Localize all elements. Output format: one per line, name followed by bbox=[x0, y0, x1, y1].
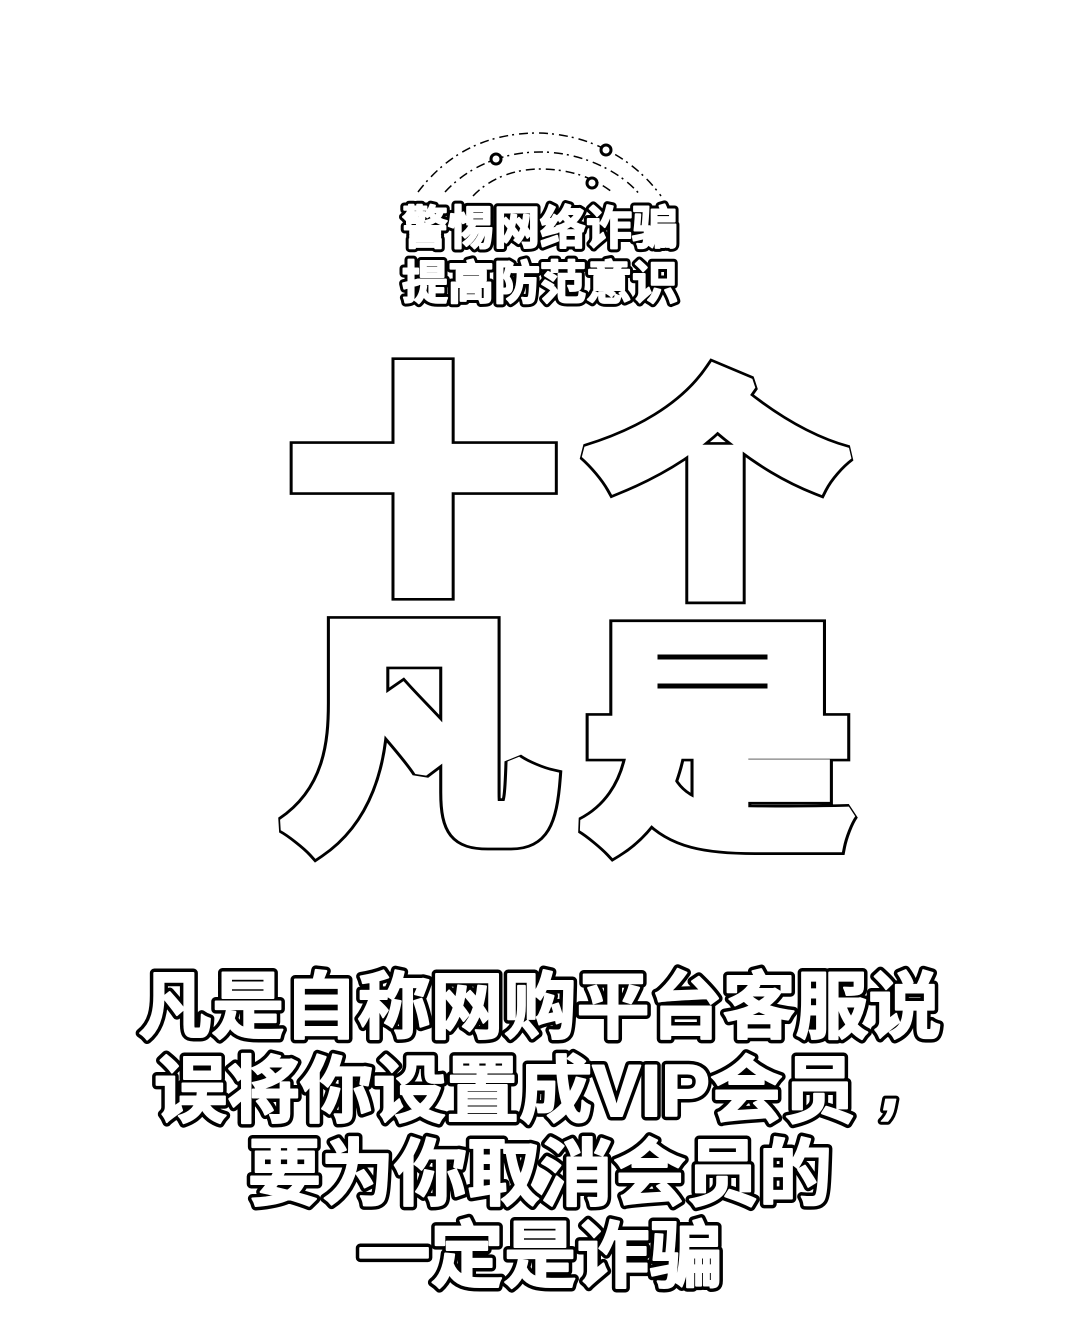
text block: warning message: 要为你取消会员的 bbox=[248, 1134, 832, 1215]
text block: warning message: 一定是诈骗 bbox=[358, 1216, 722, 1297]
title: 凡: 凡 bbox=[280, 543, 556, 895]
title: 是: 是 bbox=[580, 549, 855, 896]
heading: organisation slogan: 警惕网络诈骗 bbox=[402, 202, 678, 254]
text block: warning message: , bbox=[881, 1045, 902, 1126]
text block: warning message: 误将你设置成VIP会员 bbox=[154, 1051, 856, 1132]
title: 是: 是 bbox=[580, 549, 855, 896]
text block: warning message: 一定是诈骗 bbox=[358, 1216, 722, 1297]
title: 十: 十 bbox=[288, 295, 557, 638]
text block: warning message: 凡是自称网购平台客服说 bbox=[138, 967, 942, 1048]
text block: warning message: 要为你取消会员的 bbox=[248, 1134, 832, 1215]
title: 个: 个 bbox=[582, 298, 850, 642]
text block: warning message: , bbox=[881, 1045, 902, 1126]
text block: warning message bbox=[138, 967, 942, 1297]
heading: organisation slogan bbox=[402, 202, 678, 309]
text block: warning message: 凡是自称网购平台客服说 bbox=[138, 967, 942, 1048]
text block: warning message: 误将你设置成VIP会员 bbox=[154, 1051, 856, 1132]
title: 凡: 凡 bbox=[280, 543, 556, 895]
heading: organisation slogan: 提高防范意识 bbox=[402, 257, 678, 309]
heading: organisation slogan: 警惕网络诈骗 bbox=[402, 202, 678, 254]
title: 个: 个 bbox=[582, 298, 850, 642]
title: 十: 十 bbox=[288, 295, 557, 638]
icon: network arcs bbox=[418, 133, 661, 196]
heading: organisation slogan: 提高防范意识 bbox=[402, 257, 678, 309]
